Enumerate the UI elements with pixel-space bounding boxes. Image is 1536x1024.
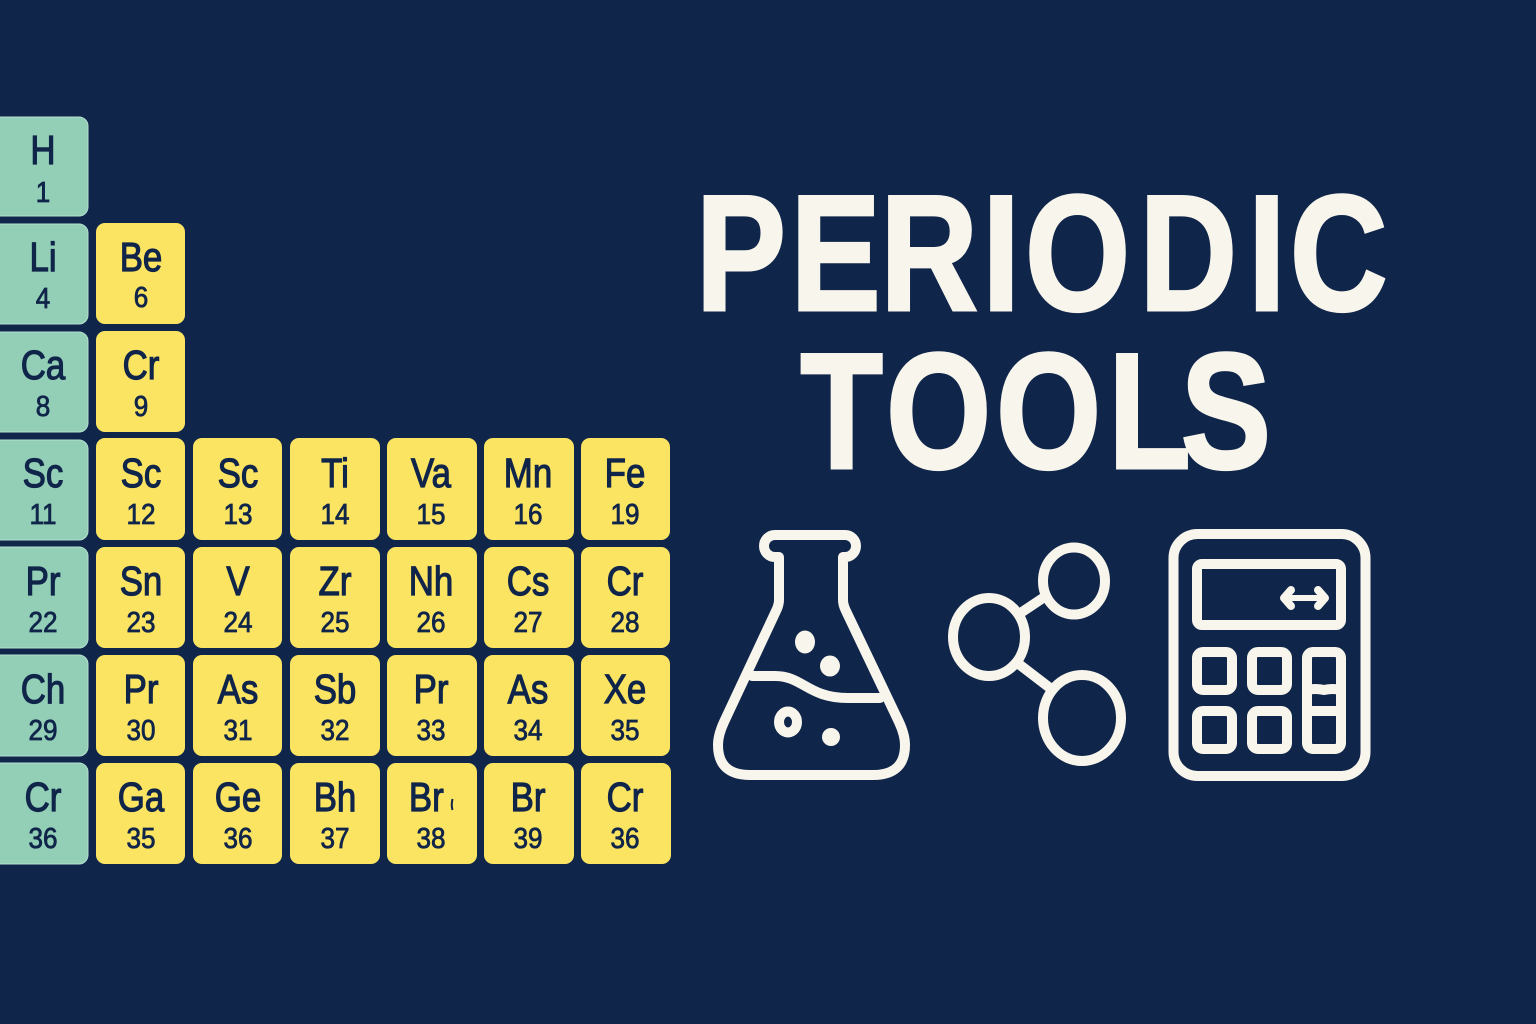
element cell: Be 6 <box>96 223 185 324</box>
element cell: Ti 14: Ti <box>321 451 349 497</box>
element cell: Va 15 <box>387 438 477 540</box>
element cell: Zr 25 <box>290 547 380 648</box>
element cell: Va 15: Va <box>411 451 452 497</box>
element cell: Xe 35: Xe <box>604 667 646 713</box>
element cell: V 24 <box>193 547 282 648</box>
element cell: Xe 35: 35 <box>610 714 640 746</box>
element cell: Zr 25: 25 <box>320 606 350 638</box>
element cell: Cr 9: Cr <box>123 343 160 389</box>
element cell: Pr 33 <box>387 655 477 756</box>
element cell: Ch 29: 29 <box>28 714 58 746</box>
element cell: H 1: 1 <box>36 176 50 208</box>
element cell: Sb 32 <box>290 655 380 756</box>
element cell: Ge 36: 36 <box>223 822 253 854</box>
element cell: Sc 12 <box>96 438 185 540</box>
element cell: Pr 30: 30 <box>126 714 156 746</box>
element cell: Sc 12: Sc <box>121 451 161 497</box>
element cell: Ca 8: Ca <box>21 343 66 389</box>
element cell: As 34: As <box>508 667 548 713</box>
element cell: Fe 19: 19 <box>610 498 640 530</box>
element cell: Ti 14: 14 <box>320 498 350 530</box>
element cell: Cr 28: Cr <box>607 559 644 605</box>
element cell: Bh 37: 37 <box>320 822 350 854</box>
element cell: Mn 16: Mn <box>504 451 552 497</box>
element cell: Cr 28: 28 <box>610 606 640 638</box>
element cell: Ge 36: Ge <box>215 775 261 821</box>
title: TOOLS <box>800 318 1271 503</box>
element cell: Li 4: Li <box>29 235 57 281</box>
element cell: Fe 19 <box>581 438 670 540</box>
element cell: Bh 37 <box>290 763 380 864</box>
element cell: Sc 13: 13 <box>223 498 253 530</box>
element cell: Bru 38 <box>387 763 477 864</box>
element cell: Bru 38: Br <box>409 775 444 821</box>
element cell: Ti 14 <box>290 438 380 540</box>
element cell: Ga 35: Ga <box>118 775 165 821</box>
icon: calculator <box>1174 534 1366 776</box>
element cell: Br 39 <box>484 763 574 864</box>
element cell: Bru 38: 38 <box>416 822 446 854</box>
panel: periodic table grid <box>0 117 671 864</box>
element cell: Ch 29: Ch <box>21 667 65 713</box>
element cell: Ch 29 <box>0 655 88 756</box>
element cell: Pr 30: Pr <box>124 667 159 713</box>
title: PERIODIC <box>696 160 1388 345</box>
element cell: H 1: H <box>30 128 56 174</box>
icon: chemistry flask <box>718 535 905 775</box>
element cell: As 31: As <box>218 667 258 713</box>
element cell: As 31: 31 <box>223 714 253 746</box>
element cell: Ca 8 <box>0 332 88 432</box>
element cell: Sc 11: 11 <box>29 498 57 530</box>
element cell: As 34 <box>484 655 574 756</box>
element cell: Pr 33: 33 <box>416 714 446 746</box>
icon: molecule network <box>953 548 1121 761</box>
element cell: Pr 33: Pr <box>414 667 449 713</box>
element cell: Sc 11: Sc <box>23 451 63 497</box>
element cell: Be 6: 6 <box>134 281 148 313</box>
element cell: Br 39: Br <box>511 775 546 821</box>
element cell: Mn 16: 16 <box>513 498 543 530</box>
element cell: Cr 9 <box>96 331 185 432</box>
element cell: Cr 36 teal: Cr <box>25 775 62 821</box>
element cell: Pr 22 <box>0 547 88 648</box>
element cell: Mn 16 <box>484 438 574 540</box>
element cell: Cr 36 teal <box>0 763 88 864</box>
element cell: Li 4: 4 <box>36 282 50 314</box>
element cell: Cr 9: 9 <box>134 390 148 422</box>
element cell: Sc 11 <box>0 440 88 540</box>
element cell: Sc 13 <box>193 438 282 540</box>
element cell: Bh 37: Bh <box>314 775 356 821</box>
element cell: Nh 26: 26 <box>416 606 446 638</box>
element cell: Sn 23: 23 <box>126 606 156 638</box>
element cell: Cr 36: Cr <box>607 775 644 821</box>
element cell: Br 39: 39 <box>513 822 543 854</box>
element cell: Ge 36 <box>193 763 282 864</box>
element cell: Sn 23 <box>96 547 185 648</box>
element cell: V 24: 24 <box>223 606 253 638</box>
element cell: Li 4 <box>0 224 88 324</box>
element cell: Sb 32: Sb <box>314 667 356 713</box>
element cell: Pr 22: 22 <box>28 606 58 638</box>
element cell: Va 15: 15 <box>416 498 446 530</box>
element cell: Zr 25: Zr <box>319 559 352 605</box>
title <box>696 160 1388 503</box>
element cell: Be 6: Be <box>120 235 162 281</box>
element cell: Cr 36 <box>581 763 671 864</box>
element cell: Ga 35 <box>96 763 185 864</box>
element cell: Sc 13: Sc <box>218 451 258 497</box>
element cell: Pr 22: Pr <box>26 559 61 605</box>
element cell: Cs 27: Cs <box>507 559 549 605</box>
element cell: Cs 27 <box>484 547 574 648</box>
element cell: Sc 12: 12 <box>126 498 156 530</box>
element cell: Ga 35: 35 <box>126 822 156 854</box>
element cell: Fe 19: Fe <box>605 451 645 497</box>
element cell: H 1 <box>0 117 88 216</box>
element cell: Nh 26 <box>387 547 477 648</box>
element cell: Ca 8: 8 <box>36 390 50 422</box>
element cell: Cs 27: 27 <box>513 606 543 638</box>
element cell: Nh 26: Nh <box>409 559 453 605</box>
element cell: Cr 36 teal: 36 <box>28 822 58 854</box>
element cell: As 31 <box>193 655 282 756</box>
element cell: Cr 36: 36 <box>610 822 640 854</box>
element cell: Sb 32: 32 <box>320 714 350 746</box>
element cell: As 34: 34 <box>513 714 543 746</box>
element cell: V 24: V <box>226 559 250 605</box>
element cell: Pr 30 <box>96 655 185 756</box>
element cell: Sn 23: Sn <box>120 559 162 605</box>
element cell: Xe 35 <box>581 655 670 756</box>
element cell: Cr 28 <box>581 547 670 648</box>
